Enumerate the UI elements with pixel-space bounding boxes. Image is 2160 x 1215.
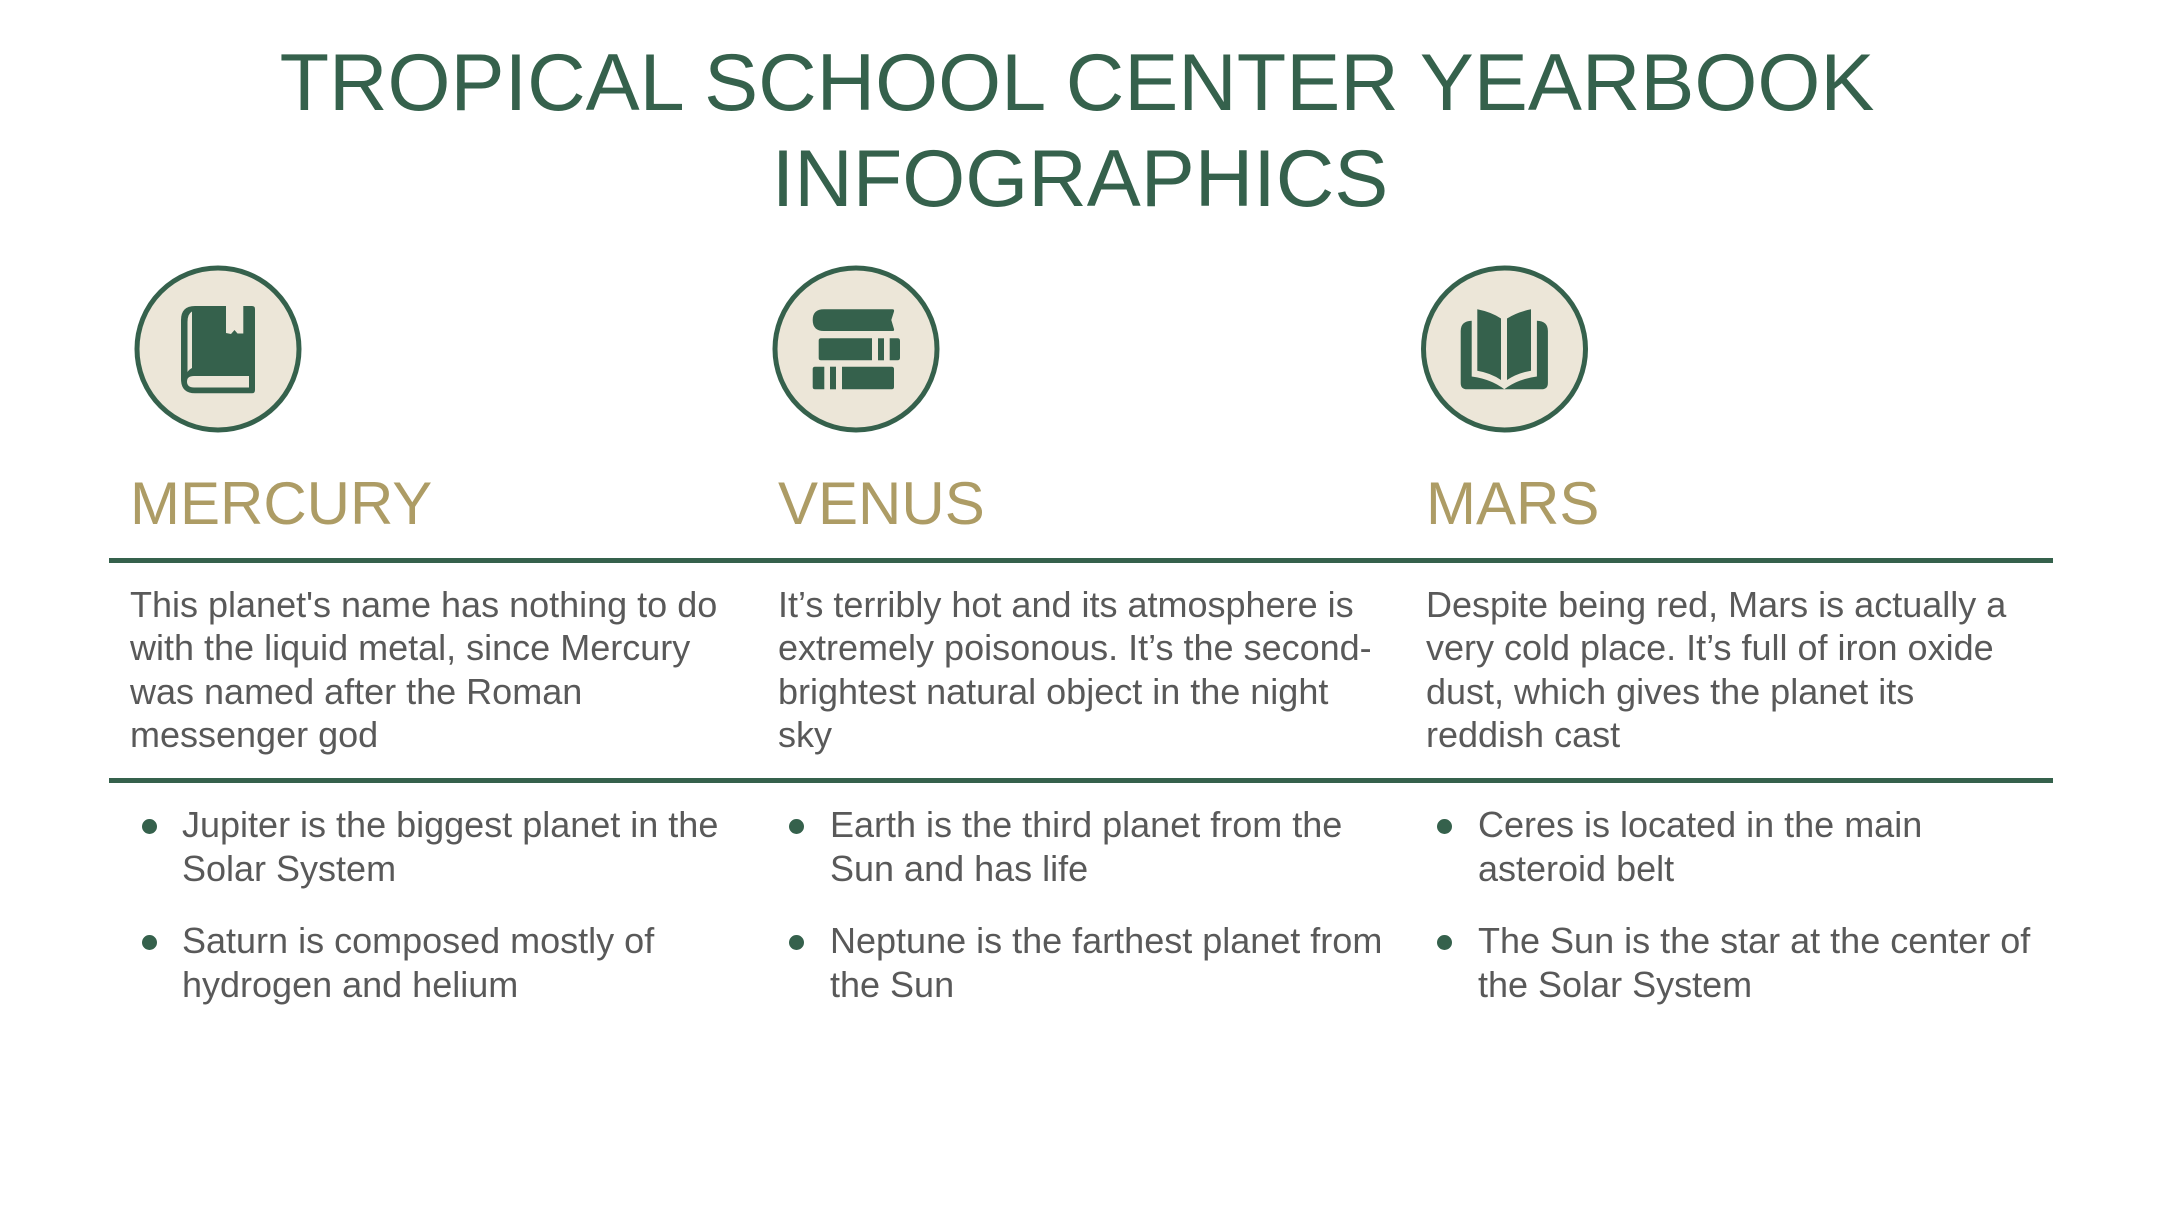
bullet: Ceres: asteroid belt — [1478, 848, 1674, 889]
description: Mars: reddish cast — [1426, 714, 1620, 755]
description: Mars — [1426, 584, 2006, 755]
bullet: Saturn — [182, 920, 654, 1005]
title: INFOGRAPHICS — [772, 134, 1388, 224]
bullet: Jupiter: Solar System — [182, 848, 396, 889]
icon: closed book with bookmark — [134, 266, 302, 432]
description: Venus: brightest natural object in the night — [778, 671, 1328, 712]
description: Venus: extremely poisonous. It’s the second- — [778, 627, 1372, 668]
bullet: Ceres: Ceres is located in the main — [1478, 804, 1922, 845]
description: Mercury: was named after the Roman — [130, 671, 582, 712]
bullet: Jupiter: Jupiter is the biggest planet in the — [182, 804, 718, 845]
bullet marker — [142, 818, 156, 834]
bullet: Jupiter — [182, 804, 718, 889]
bullet: Earth — [830, 804, 1342, 889]
bullet marker — [788, 818, 804, 834]
divider rule top — [109, 558, 2053, 563]
bullet: Sun: The Sun is the star at the center of — [1478, 920, 2030, 961]
bullet: Earth: Earth is the third planet from the — [830, 804, 1342, 845]
description: Mars: Despite being red, Mars is actually a — [1426, 584, 2006, 625]
description: Mercury: This planet's name has nothing to do — [130, 584, 717, 625]
description: Venus: sky — [778, 714, 832, 755]
bullet: Earth: Sun and has life — [830, 848, 1088, 889]
heading: Mercury: MERCURY — [130, 470, 432, 537]
bullet: Sun — [1478, 920, 2030, 1005]
description: Mars: dust, which gives the planet its — [1426, 671, 1914, 712]
bullet marker — [788, 935, 804, 950]
description: Venus: It’s terribly hot and its atmosphere is — [778, 584, 1354, 625]
bullet marker — [1437, 935, 1452, 950]
description: Mercury — [130, 584, 717, 755]
heading: Venus: VENUS — [778, 470, 985, 537]
bullet: Saturn: Saturn is composed mostly of — [182, 920, 654, 961]
divider rule bottom — [109, 778, 2053, 783]
description: Mars: very cold place. It’s full of iron oxide — [1426, 627, 1994, 668]
bullet: Neptune — [830, 920, 1382, 1005]
heading: Mars: MARS — [1426, 470, 1599, 537]
description: Mercury: messenger god — [130, 714, 378, 755]
title — [280, 38, 1874, 224]
icon: stack of books — [772, 266, 940, 432]
description: Venus — [778, 584, 1372, 755]
description: Mercury: with the liquid metal, since Mercury — [130, 627, 690, 668]
bullet: Neptune: the Sun — [830, 964, 954, 1005]
bullet: Saturn: hydrogen and helium — [182, 964, 518, 1005]
title: TROPICAL SCHOOL CENTER YEARBOOK — [280, 38, 1874, 128]
icon: open book — [1421, 266, 1588, 432]
bullet marker — [1437, 818, 1452, 834]
bullet: Ceres — [1478, 804, 1922, 889]
bullet marker — [142, 935, 156, 950]
bullet: Sun: the Solar System — [1478, 964, 1752, 1005]
bullet: Neptune: Neptune is the farthest planet from — [830, 920, 1382, 961]
